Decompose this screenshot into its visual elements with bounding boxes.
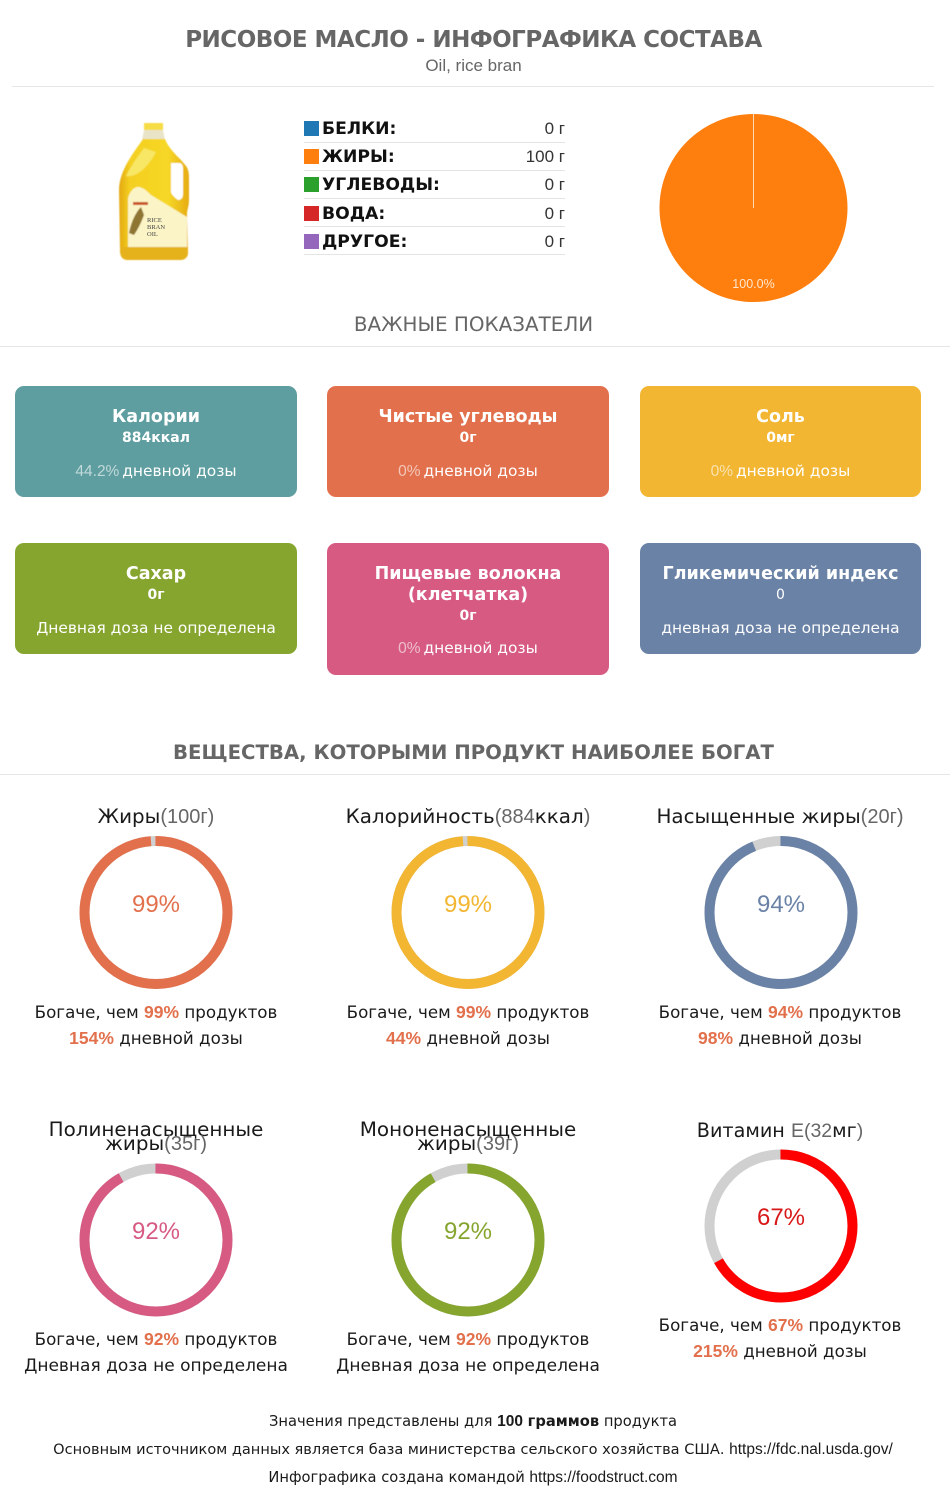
card: salt: 0мг <box>766 430 795 446</box>
card: calories: 884ккал <box>122 430 190 446</box>
icon: rice bran oil bottle <box>118 122 190 261</box>
stats: calories: Богаче, чем 99% продуктов <box>347 1002 589 1022</box>
card: glycemic index: Гликемический индекс <box>663 564 898 584</box>
stats: fat: 154% дневной дозы <box>69 1028 243 1048</box>
text: 0 г <box>545 119 565 138</box>
stats: saturated fat: 98% дневной дозы <box>698 1028 862 1048</box>
stats: fat <box>35 1002 277 1048</box>
ring chart: polyunsaturated 92% <box>80 1164 232 1316</box>
card: net carbs: 0г <box>459 430 477 446</box>
heading: vitamin E: Витамин E(32мг) <box>697 1119 863 1142</box>
card: calories: Калории <box>112 407 200 427</box>
card: dietary fiber: 0% дневной дозы <box>398 639 538 657</box>
heading: saturated fat: Насыщенные жиры(20г) <box>656 805 904 828</box>
stats: monounsaturated <box>336 1329 600 1376</box>
heading: monounsaturated fat <box>360 1118 576 1155</box>
card: dietary fiber: Пищевые волокна <box>375 564 561 584</box>
card: glycemic index: 0 <box>776 587 785 603</box>
card: sugar: 0г <box>147 587 165 603</box>
ring chart: fat 99%: 99% <box>132 891 180 918</box>
card: calories: 44.2% дневной дозы <box>75 462 237 480</box>
stats: polyunsaturated: Дневная доза не определена <box>24 1356 288 1376</box>
stats: monounsaturated: Дневная доза не определена <box>336 1356 600 1376</box>
card: net carbs: 0% дневной дозы <box>398 462 538 480</box>
stats: fat: Богаче, чем 99% продуктов <box>35 1002 277 1022</box>
text: УГЛЕВОДЫ: <box>322 175 440 195</box>
pie chart <box>660 114 848 302</box>
section heading: richest nutrients: ВЕЩЕСТВА, КОТОРЫМИ ПРОДУКТ НАИБОЛЕЕ БОГАТ <box>173 741 774 764</box>
section heading: important indicators: ВАЖНЫЕ ПОКАЗАТЕЛИ <box>354 313 593 336</box>
icon: rice bran oil bottle: OIL <box>147 231 158 238</box>
text: ДРУГОЕ: <box>322 232 407 252</box>
stats: monounsaturated: Богаче, чем 92% продуктов <box>347 1329 589 1349</box>
stats: calories: 44% дневной дозы <box>386 1028 550 1048</box>
footer note: data source: Основным источником данных является база министерства сельского хозяйства США. https://fdc.nal.usda.gov/ <box>53 1441 893 1458</box>
stats: vitamin E: Богаче, чем 67% продуктов <box>659 1315 901 1335</box>
card: net carbs: Чистые углеводы <box>378 407 558 427</box>
text: 0 г <box>545 232 565 251</box>
ring chart: monounsaturated 92% <box>392 1164 544 1316</box>
heading: monounsaturated fat: жиры(39г) <box>417 1132 519 1155</box>
card: dietary fiber: 0г <box>459 608 477 624</box>
heading: polyunsaturated fat: Полиненасыщенные <box>49 1118 263 1141</box>
card: sugar: Сахар <box>126 564 186 584</box>
ring chart: monounsaturated 92%: 92% <box>444 1218 492 1245</box>
title: РИСОВОЕ МАСЛО - ИНФОГРАФИКА СОСТАВА <box>185 27 762 53</box>
card: sugar: Дневная доза не определена <box>36 619 276 637</box>
card: dietary fiber: (клетчатка) <box>408 585 528 605</box>
heading: polyunsaturated fat <box>49 1118 263 1155</box>
heading: fat: Жиры(100г) <box>98 805 214 828</box>
ring chart: vitamin E 67%: 67% <box>757 1204 805 1231</box>
card: salt: Соль <box>756 407 805 427</box>
stats: saturated fat <box>659 1002 901 1048</box>
stats: polyunsaturated: Богаче, чем 92% продуктов <box>35 1329 277 1349</box>
text: ВОДА: <box>322 204 385 224</box>
stats: saturated fat: Богаче, чем 94% продуктов <box>659 1002 901 1022</box>
card: dietary fiber <box>327 543 609 675</box>
ring chart: polyunsaturated 92%: 92% <box>132 1218 180 1245</box>
stats: vitamin E: 215% дневной дозы <box>693 1341 867 1361</box>
stats: calories <box>347 1002 589 1048</box>
icon: rice bran oil bottle: BRAN <box>147 224 165 231</box>
card: salt <box>640 386 921 497</box>
ring chart: saturated fat 94%: 94% <box>757 891 805 918</box>
macronutrient legend table <box>304 119 565 255</box>
ring chart: calories 99% <box>392 836 544 989</box>
card: calories <box>15 386 297 497</box>
text: 100 г <box>526 147 565 166</box>
stats: polyunsaturated <box>24 1329 288 1376</box>
heading: calories: Калорийность(884ккал) <box>346 805 590 828</box>
ring chart: saturated fat 94% <box>704 836 858 989</box>
ring chart: fat 99% <box>80 836 232 989</box>
stats: vitamin E <box>659 1315 901 1361</box>
card: net carbs <box>327 386 609 497</box>
icon: rice bran oil bottle: RICE <box>147 217 162 224</box>
footer note: credits: Инфографика создана командой https://foodstruct.com <box>268 1469 678 1486</box>
text: 0 г <box>545 175 565 194</box>
text: ЖИРЫ: <box>322 147 395 167</box>
subtitle: Oil, rice bran <box>425 56 522 75</box>
card: glycemic index: дневная доза не определена <box>661 619 900 637</box>
heading: monounsaturated fat: Мононенасыщенные <box>360 1118 576 1141</box>
heading: polyunsaturated fat: жиры(35г) <box>105 1132 207 1155</box>
ring chart: calories 99%: 99% <box>444 891 492 918</box>
ring chart: vitamin E 67% <box>704 1150 858 1302</box>
card: salt: 0% дневной дозы <box>711 462 850 480</box>
card: glycemic index <box>640 543 921 654</box>
pie chart: 100.0% <box>732 277 775 291</box>
card: sugar <box>15 543 297 654</box>
text: 0 г <box>545 204 565 223</box>
footer note: per 100 grams: Значения представлены для 100 граммов продукта <box>269 1413 677 1430</box>
text: БЕЛКИ: <box>322 119 396 139</box>
